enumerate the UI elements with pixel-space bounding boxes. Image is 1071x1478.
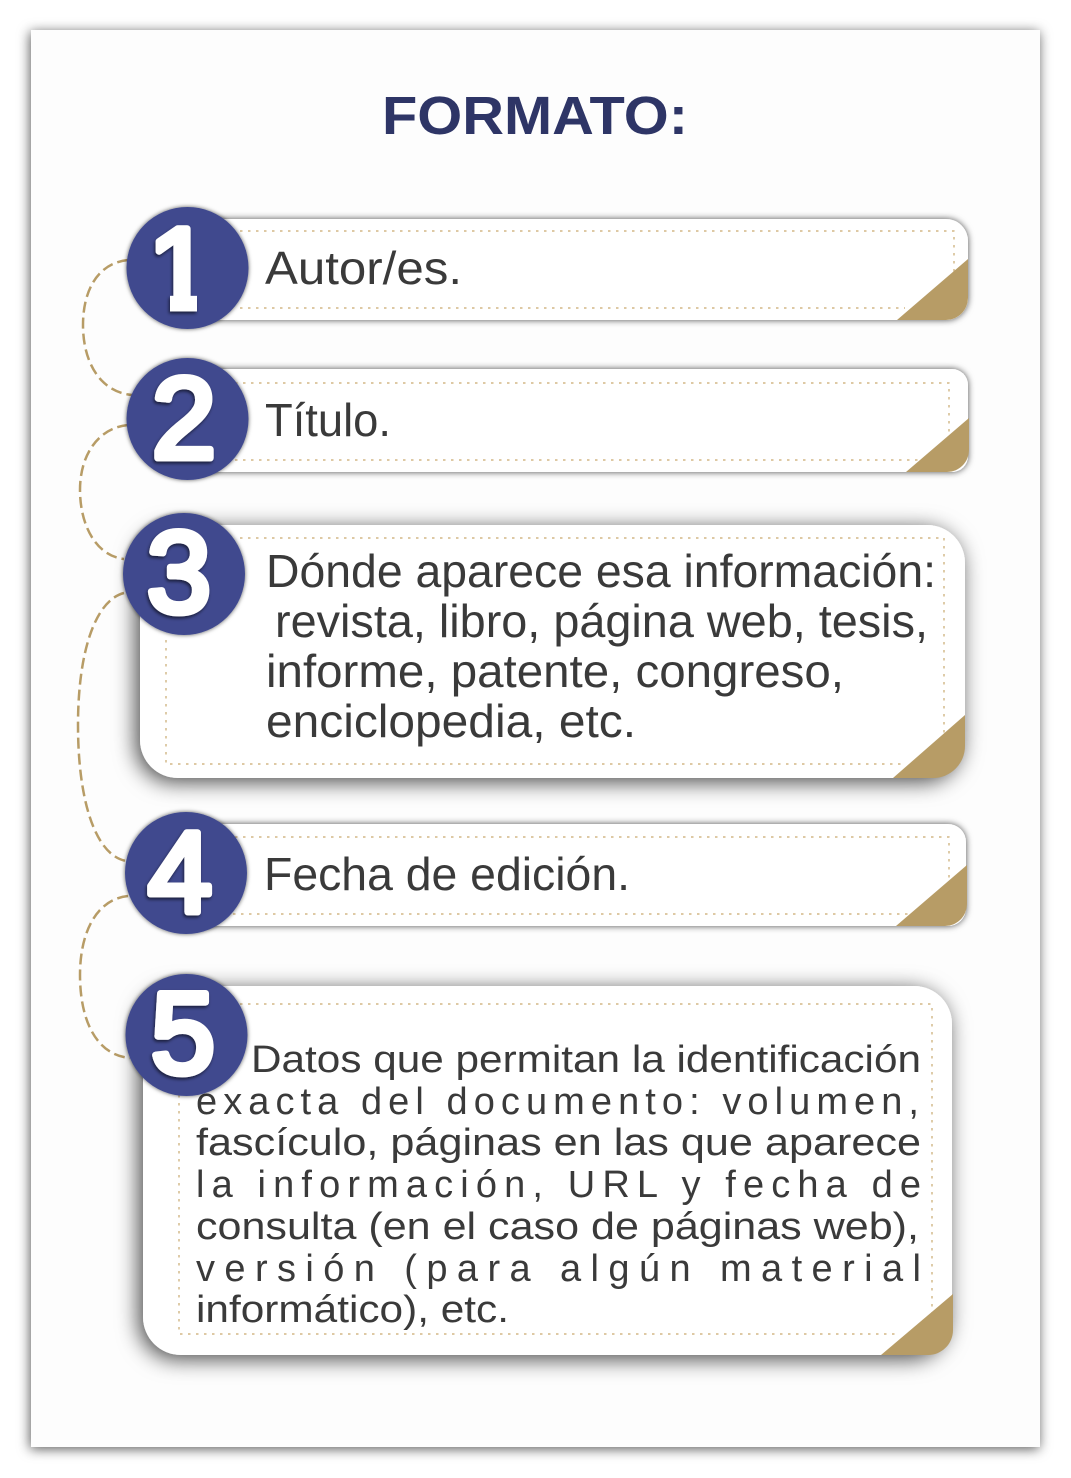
text: datos: informático), etc. xyxy=(196,1289,509,1331)
panel: step 4 xyxy=(190,824,967,926)
text: titulo: Título. xyxy=(265,394,391,446)
text: fecha: Fecha de edición. xyxy=(264,848,630,900)
panel: step 1 xyxy=(190,219,968,320)
text: datos: consulta (en el caso de páginas web), xyxy=(196,1206,919,1248)
text: donde aparece: revista, libro, página web, tesis, xyxy=(275,595,928,647)
text: donde aparece xyxy=(266,545,936,747)
badge: 1 xyxy=(126,205,248,333)
text: datos xyxy=(196,1039,921,1331)
dashed connectors xyxy=(78,260,132,1058)
badge: 2 xyxy=(126,355,248,483)
badge: 3 xyxy=(123,509,245,637)
badge: 1: 1 xyxy=(148,205,212,333)
text: datos: versión (para algún material xyxy=(196,1248,921,1290)
text: autor: Autor/es. xyxy=(265,242,462,294)
text: donde aparece: Dónde aparece esa información: xyxy=(266,545,936,597)
text: datos: Datos que permitan la identificación xyxy=(251,1039,921,1081)
text: datos: la información, URL y fecha de xyxy=(196,1164,921,1206)
badge: 3: 3 xyxy=(147,509,211,637)
badge: 4: 4 xyxy=(148,809,212,937)
text: datos: exacta del documento: volumen, xyxy=(196,1081,919,1123)
title: FORMATO: xyxy=(382,86,688,146)
badge: 5: 5 xyxy=(151,970,215,1098)
text: donde aparece: enciclopedia, etc. xyxy=(266,695,636,747)
panel: step 3 xyxy=(140,525,965,778)
badge: 4 xyxy=(125,809,247,937)
panel: step 5 xyxy=(143,986,953,1355)
text: donde aparece: informe, patente, congreso, xyxy=(266,645,844,697)
panel: step 2 xyxy=(190,369,969,472)
badge: 2: 2 xyxy=(152,355,216,483)
badge: 5 xyxy=(126,970,248,1098)
text: datos: fascículo, páginas en las que aparece xyxy=(196,1122,921,1164)
